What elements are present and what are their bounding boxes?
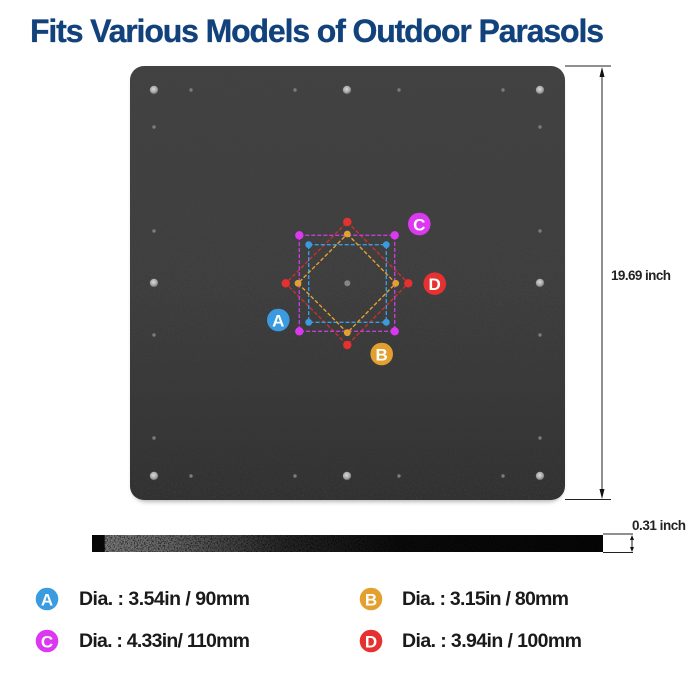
plate side view [92,535,603,552]
panel: square base plate [130,66,565,502]
dimension: plate height [565,66,671,500]
large mounting holes [150,86,544,480]
pattern A: blue square [305,241,390,326]
legend item B: B [365,590,377,609]
pattern B: orange diamond [295,231,399,336]
thickness label: 0.31 inch [632,518,686,533]
badge C: C [413,215,425,234]
legend [36,588,582,652]
legend item B: Dia. : 3.15in / 80mm [402,588,569,610]
legend item D: Dia. : 3.94in / 100mm [402,630,582,652]
pattern C: magenta square [295,231,399,335]
badge B [370,343,393,365]
badge D [423,272,446,295]
badge A: A [272,311,284,330]
diagram: hole patterns [267,213,446,365]
badge A [267,309,290,331]
small mounting holes [152,88,542,478]
title: Fits Various Models of Outdoor Parasols [30,13,604,49]
dimension: plate thickness [603,518,686,552]
badge D: D [429,275,441,294]
legend item A: Dia. : 3.54in / 90mm [79,588,250,610]
badge C [408,213,431,235]
legend item C: C [41,632,53,651]
badge B: B [376,345,388,364]
height label: 19.69 inch [611,268,671,283]
legend item D: D [365,632,377,651]
pattern D: red diamond [282,218,412,349]
legend item C: Dia. : 4.33in/ 110mm [79,630,250,652]
legend item A: A [41,590,53,609]
